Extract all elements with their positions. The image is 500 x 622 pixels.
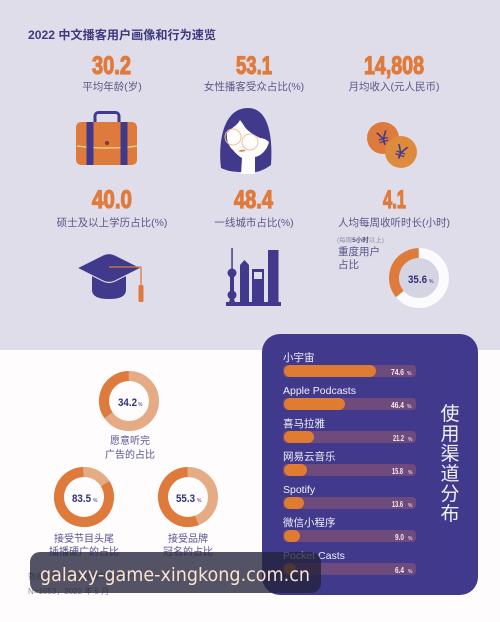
bar: 网易云音乐 bbox=[283, 450, 416, 476]
bar: Pocket Casts: 6.4 bbox=[395, 566, 404, 575]
bar: 微信小程序 bbox=[283, 516, 416, 542]
stat: weekly listening hours: 人均每周收听时长(小时) bbox=[338, 216, 450, 229]
donut: finish ads 34.2%: 34.2 bbox=[118, 397, 137, 409]
label: finish ads: 愿意听完 bbox=[110, 434, 150, 447]
label: brand naming: 冠名的占比 bbox=[163, 545, 213, 558]
icon: briefcase bbox=[76, 112, 137, 165]
stat: master's degree: 硕士及以上学历占比(%) bbox=[57, 216, 167, 229]
bar: 小宇宙: 小宇宙 bbox=[283, 351, 314, 364]
icon: graduation cap bbox=[77, 254, 144, 302]
stat: average age: 30.2 bbox=[92, 52, 131, 80]
donut: heavy users 35.6% bbox=[384, 243, 454, 313]
title: 2022 中文播客用户画像和行为速览 bbox=[28, 27, 216, 42]
stat: female share: 女性播客受众占比(%) bbox=[204, 80, 304, 93]
bar: 喜马拉雅: 喜马拉雅 bbox=[283, 417, 325, 430]
top section background bbox=[0, 0, 500, 350]
bar: 网易云音乐: 网易云音乐 bbox=[283, 450, 336, 463]
bar: 小宇宙: 74.6 bbox=[391, 368, 404, 377]
heavy user label: 占比 bbox=[338, 258, 359, 271]
bar: 网易云音乐: 15.8 bbox=[392, 467, 403, 476]
bar: Pocket Casts: Pocket Casts bbox=[283, 550, 345, 562]
stat: weekly listening hours: 4.1 bbox=[383, 186, 406, 214]
donut: pre and post roll ads 83.5%: 83.5 bbox=[72, 493, 91, 505]
panel title: vertical: 分 bbox=[440, 483, 460, 505]
bar: Spotify: Spotify bbox=[283, 484, 316, 496]
icon: yuan coins: ¥ bbox=[391, 140, 410, 165]
stat: master's degree bbox=[57, 186, 167, 229]
panel title: vertical bbox=[440, 403, 460, 525]
source note: 数据来源：中文播客听众调查 bbox=[28, 571, 132, 581]
icon: yuan coins bbox=[367, 122, 417, 168]
donut: pre and post roll ads 83.5% bbox=[50, 463, 118, 531]
stat: female share: 53.1 bbox=[236, 52, 272, 80]
panel title: vertical: 用 bbox=[440, 424, 460, 445]
bar: 喜马拉雅: 21.2 bbox=[393, 434, 404, 443]
label: finish ads bbox=[105, 434, 155, 461]
bar: Spotify: % bbox=[408, 503, 413, 509]
panel title: vertical: 道 bbox=[440, 463, 460, 485]
donut: brand naming 55.3%: 55.3 bbox=[176, 493, 195, 505]
label: finish ads: 广告的占比 bbox=[105, 448, 155, 461]
stat: female share bbox=[204, 52, 304, 93]
donut: pre and post roll ads 83.5%: % bbox=[93, 498, 98, 504]
heavy user label: (每周5小时以上) bbox=[337, 235, 384, 244]
bar: 小宇宙: % bbox=[407, 371, 412, 377]
stat: tier-one cities bbox=[214, 186, 294, 229]
label: pre and post roll ads: 插播硬广的占比 bbox=[49, 545, 119, 558]
donut: finish ads 34.2% bbox=[94, 366, 164, 436]
donut: brand naming 55.3% bbox=[156, 465, 220, 529]
bar: 微信小程序: 微信小程序 bbox=[283, 516, 336, 529]
heavy user label bbox=[337, 235, 384, 271]
donut: brand naming 55.3%: % bbox=[197, 498, 202, 504]
bar: Spotify bbox=[283, 484, 416, 509]
bar: Apple Podcasts bbox=[283, 385, 416, 410]
bar: Apple Podcasts: Apple Podcasts bbox=[283, 385, 356, 397]
icon: woman with glasses bbox=[220, 108, 271, 174]
bar: Spotify: 13.6 bbox=[392, 500, 403, 509]
stat: monthly income: 14,808 bbox=[364, 52, 424, 80]
bar: 小宇宙 bbox=[283, 351, 416, 377]
bar: 网易云音乐: % bbox=[408, 470, 413, 476]
stat: master's degree: 40.0 bbox=[92, 186, 132, 214]
source note bbox=[28, 571, 132, 596]
bar: 喜马拉雅 bbox=[283, 417, 416, 443]
bar: Pocket Casts: % bbox=[408, 569, 413, 575]
stat: monthly income bbox=[348, 52, 440, 93]
label: pre and post roll ads bbox=[49, 532, 119, 558]
panel: usage channels bbox=[262, 334, 478, 595]
stat: tier-one cities: 48.4 bbox=[234, 186, 273, 214]
stat: weekly listening hours bbox=[338, 186, 450, 229]
icon: yuan coins: ¥ bbox=[374, 127, 392, 151]
label: pre and post roll ads: 接受节目头尾 bbox=[54, 532, 114, 545]
watermark banner: galaxy-game-xingkong.com.cn bbox=[40, 564, 310, 586]
donut: heavy users 35.6%: 35.6 bbox=[408, 274, 427, 286]
panel title: vertical: 渠 bbox=[440, 443, 460, 465]
heavy user label: 重度用户 bbox=[338, 245, 380, 258]
panel title: vertical: 布 bbox=[440, 503, 460, 525]
bar: 微信小程序: % bbox=[408, 536, 413, 542]
bar: Apple Podcasts: % bbox=[407, 404, 412, 410]
bar: Pocket Casts bbox=[283, 550, 416, 575]
label: brand naming: 接受品牌 bbox=[168, 532, 208, 545]
icon: city skyline bbox=[226, 248, 281, 306]
stat: monthly income: 月均收入(元人民币) bbox=[348, 80, 440, 93]
stat: average age: 平均年龄(岁) bbox=[82, 80, 142, 93]
bar: 喜马拉雅: % bbox=[408, 437, 413, 443]
donut: finish ads 34.2%: % bbox=[138, 402, 143, 408]
donut: heavy users 35.6%: % bbox=[429, 279, 434, 285]
stat: tier-one cities: 一线城市占比(%) bbox=[214, 216, 294, 229]
bar: 微信小程序: 9.0 bbox=[395, 533, 404, 542]
bar: Apple Podcasts: 46.4 bbox=[391, 401, 404, 410]
stat: average age bbox=[82, 52, 142, 93]
watermark banner bbox=[30, 552, 321, 593]
source note: N=1053，2022 年 5 月 bbox=[28, 586, 109, 596]
panel title: vertical: 使 bbox=[440, 403, 460, 425]
label: brand naming bbox=[163, 532, 213, 558]
